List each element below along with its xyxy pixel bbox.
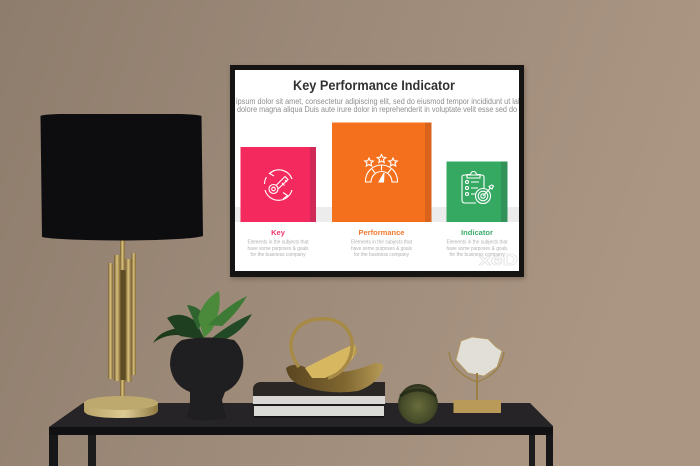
icon: clipboard with target — [462, 172, 494, 204]
agate stone on stand — [449, 337, 504, 413]
subtitle text — [236, 98, 519, 114]
description: Performance: for the business company — [354, 252, 409, 258]
description: Performance: have some purposes & goals — [351, 246, 412, 252]
block: Indicator — [446, 162, 508, 222]
stacked books — [253, 382, 385, 418]
block: Key — [240, 147, 316, 222]
description: Key: Elements in the subjects that — [248, 240, 309, 246]
icon: gauge with three stars — [365, 154, 398, 182]
floor band — [235, 207, 519, 222]
infographic panel — [235, 78, 522, 258]
leaves — [153, 291, 252, 343]
description: Indicator: for the business company — [450, 252, 505, 258]
black vase — [170, 338, 243, 420]
block: Performance — [332, 122, 432, 222]
label: Performance: Performance — [358, 228, 404, 237]
console table — [49, 403, 553, 466]
label: Key: Key — [271, 228, 286, 237]
lamp rods — [108, 240, 136, 400]
potted plant — [153, 291, 252, 420]
title: Key Performance Indicator — [293, 78, 456, 93]
gold ring sculpture — [286, 319, 383, 392]
description: Performance — [351, 240, 413, 258]
glass sphere — [398, 384, 438, 424]
lamp base — [84, 396, 158, 418]
subtitle text: ipsum dolor sit amet, consectetur adipiscing elit, sed do eiusmod tempor incididunt ut lab — [236, 97, 522, 106]
table lamp — [40, 114, 203, 418]
description: Indicator: have some purposes & goals — [446, 246, 508, 252]
picture frame — [230, 65, 525, 279]
description: Indicator — [446, 240, 508, 258]
description: Key — [248, 240, 309, 258]
description: Key: have some purposes & goals — [248, 246, 309, 252]
subtitle text: dolore magna aliqua Duis aute irure dolor in reprehenderit in voluptate velit esse sed do — [237, 105, 517, 114]
label: Performance — [351, 228, 413, 258]
description: Indicator: Elements in the subjects that — [446, 240, 508, 246]
label: Indicator — [446, 228, 508, 258]
lamp shade — [40, 114, 203, 240]
description: Key: for the business company — [250, 252, 306, 258]
watermark: xeD — [479, 252, 518, 269]
label: Key — [248, 230, 308, 257]
icon: key with rotation arrows — [264, 170, 292, 200]
label: Indicator: Indicator — [461, 228, 493, 237]
description: Performance: Elements in the subjects that — [351, 240, 413, 246]
